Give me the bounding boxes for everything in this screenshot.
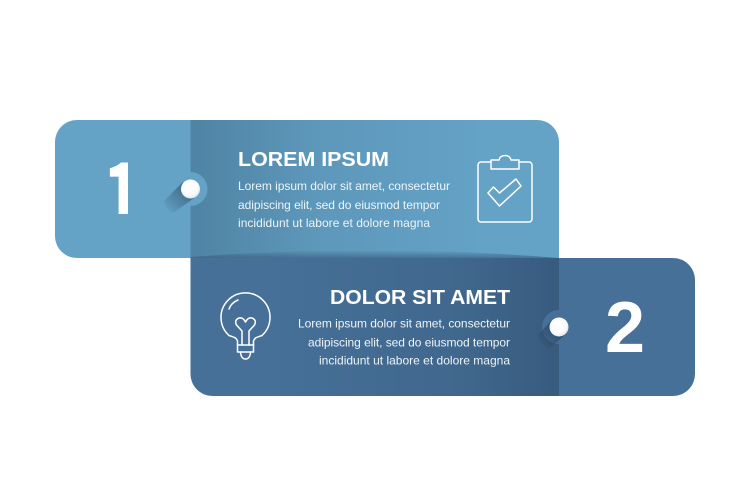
body text 1: Lorem ipsum dolor sit amet, consectetur — [238, 179, 450, 193]
connector dot 1 — [164, 172, 208, 213]
heading: Lorem Ipsum: LOREM IPSUM — [238, 149, 389, 171]
panel 2: dark blue card — [190, 258, 695, 396]
body text 2: incididunt ut labore et dolore magna — [319, 354, 510, 368]
body text 1: adipiscing elit, sed do eiusmod tempor — [238, 198, 440, 212]
connector dot 2 — [538, 310, 576, 349]
body text 1 — [238, 179, 450, 230]
panel 1: light blue card — [55, 120, 559, 258]
icon: clipboard with check — [478, 156, 532, 222]
step number 1: 1 — [103, 123, 141, 256]
step number 2: 2 — [605, 288, 645, 368]
heading: Dolor Sit Amet: DOLOR SIT AMET — [330, 287, 510, 309]
body text 1: incididunt ut labore et dolore magna — [238, 216, 430, 230]
icon: light bulb — [221, 293, 270, 359]
body text 2: adipiscing elit, sed do eiusmod tempor — [308, 336, 510, 350]
body text 2: Lorem ipsum dolor sit amet, consectetur — [298, 316, 510, 330]
body text 2 — [298, 316, 510, 368]
